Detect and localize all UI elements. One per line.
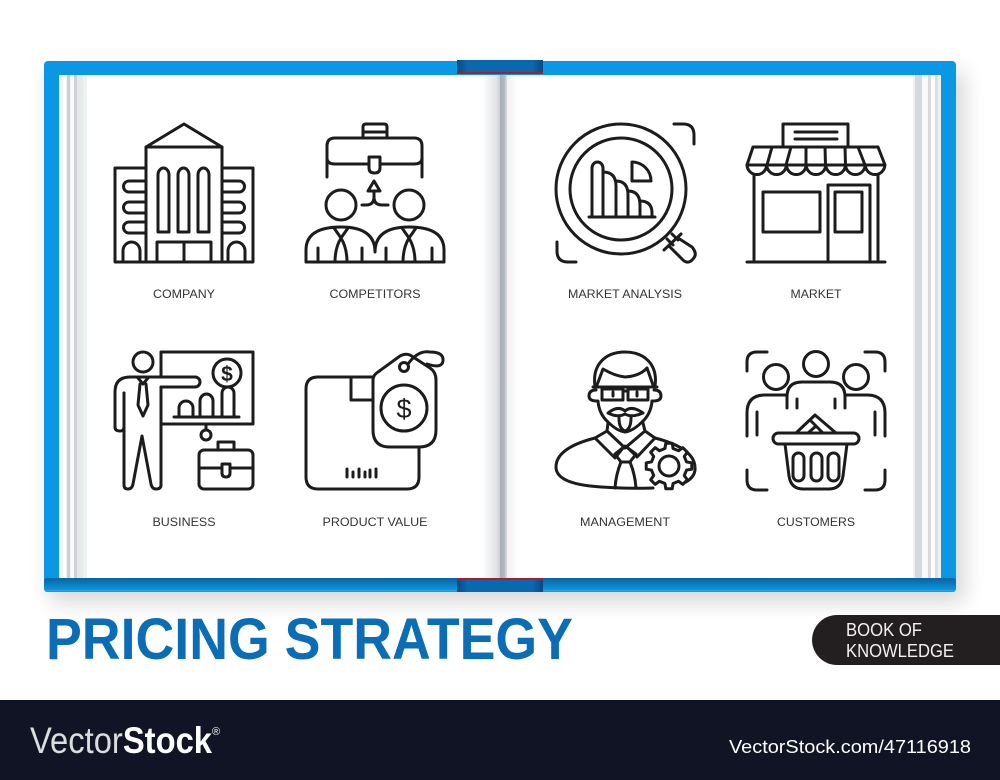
icon: business (115, 352, 253, 489)
icon: competitors (306, 124, 444, 262)
badge: book of knowledge: KNOWLEDGE (846, 641, 954, 661)
label: product value: PRODUCT VALUE (322, 515, 428, 529)
registered mark: ® (212, 726, 220, 738)
label: company: COMPANY (153, 287, 215, 301)
right page edge stripes (913, 75, 941, 578)
title: PRICING STRATEGY (46, 607, 573, 672)
icon text: business dollar sign: $ (221, 363, 233, 386)
icon: market (747, 124, 885, 262)
label: market: MARKET (790, 287, 842, 301)
icon: company (115, 124, 253, 262)
label: management: MANAGEMENT (580, 515, 671, 529)
label: business: BUSINESS (152, 515, 216, 529)
icon: management (556, 352, 695, 489)
watermark logo: VectorStock (30, 720, 212, 761)
badge: book of knowledge (812, 615, 1000, 665)
spine bottom (457, 578, 543, 592)
icon: product value (306, 352, 443, 489)
label: market analysis: MARKET ANALYSIS (568, 287, 682, 301)
icon text: product value dollar sign: $ (396, 394, 412, 424)
image id: VectorStock.com/47116918 (729, 737, 971, 757)
icon: customers (747, 352, 885, 490)
label: competitors: COMPETITORS (330, 287, 420, 301)
label: customers: CUSTOMERS (777, 515, 855, 529)
icon: market analysis (556, 124, 695, 262)
page gutter (482, 75, 518, 578)
badge: book of knowledge: BOOK OF (846, 620, 922, 640)
footer bar (0, 700, 1000, 780)
left page edge stripes (59, 75, 87, 578)
book (44, 60, 964, 602)
spine top (457, 60, 543, 74)
